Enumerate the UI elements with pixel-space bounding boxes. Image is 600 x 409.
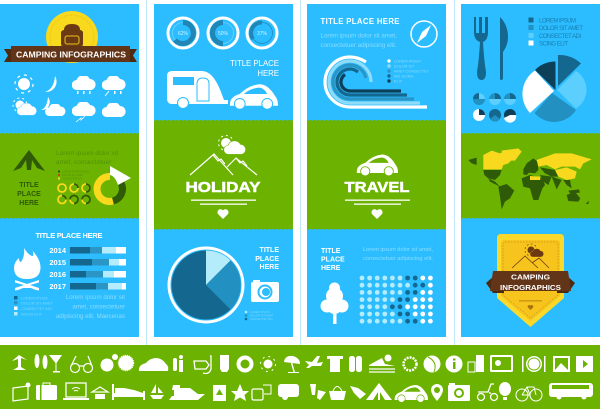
icon: safe: [490, 355, 513, 372]
icon: plane: [305, 356, 323, 368]
legend: bars: SCING ELIT: [21, 312, 43, 316]
ribbon: camping infographics: INFOGRAPHICS: [500, 283, 561, 292]
legend: bars: DOLOR SIT AMET: [21, 302, 53, 306]
legend: bars: [14, 296, 53, 316]
heading: title place here 2: PLACE: [255, 256, 279, 263]
ribbon: camping infographics: CAMPING: [511, 272, 550, 282]
icon: moon: [45, 76, 57, 92]
heading: title place here: HERE: [257, 69, 279, 78]
heading: title place here 2: TITLE: [321, 248, 341, 255]
panel: camping weather: [0, 4, 139, 337]
heading: title place here: TITLE PLACE HERE: [320, 17, 400, 26]
heading: travel: TRAVEL: [344, 179, 410, 196]
divider: shield: [519, 300, 542, 302]
legend: spiral: ELIT: [394, 80, 403, 84]
text block: green lorem: amet, consectetuer: [56, 159, 112, 166]
icon: pin: [431, 384, 443, 401]
badge: backpack: [46, 11, 98, 63]
panel: holiday: [154, 4, 293, 337]
icon: rain cloud: [72, 75, 96, 94]
icon: dice: [252, 385, 271, 400]
legend: pie: DOLOR SIT AMET: [250, 314, 274, 318]
pie chart: [169, 248, 243, 322]
icon: car: [230, 84, 278, 109]
spiral bar chart: [325, 57, 427, 107]
text block: blue lorem: Lorem ipsum dolor sit: [66, 294, 125, 301]
text block: lorem: consectetuer adipiscing elit.: [320, 42, 397, 49]
stacked bar chart: [49, 246, 126, 291]
legend: food: [528, 18, 583, 48]
icon: sun: [15, 75, 33, 93]
icon: tent: [13, 150, 45, 171]
icon: plate: [522, 356, 546, 372]
icon: storm cloud: [102, 75, 126, 96]
icon: palm: [12, 355, 27, 370]
legend: spiral: AMET CONSECTET: [394, 70, 430, 74]
weather icons: [13, 75, 126, 122]
icon: sun behind cloud: [13, 98, 37, 115]
legend: pie: CONSECTET ADI: [250, 317, 273, 321]
ring chart: 37%: 37%: [257, 31, 268, 37]
icon: sun burst: [118, 356, 134, 370]
ring chart: 62%: [168, 18, 198, 48]
ring chart: 62%: 62%: [178, 31, 189, 37]
icon: life ring: [238, 358, 252, 370]
pie chart: exploded: [522, 55, 586, 122]
legend: bars: LOREM IPSUM: [21, 296, 48, 300]
text block: blue lorem: amet, consectetuer: [72, 304, 125, 310]
text block: blue lorem: adipiscing elit. Maecenas: [56, 313, 125, 320]
heading: title place here 2: HERE: [260, 264, 279, 271]
heading: title place here 2: TITLE: [260, 247, 279, 254]
donut chart: [97, 166, 131, 201]
badge: shield: [486, 234, 575, 327]
icon: tree: [320, 282, 348, 324]
icon: camera: [251, 280, 279, 302]
icon: globe pin: [100, 354, 118, 372]
panel: world and food: [461, 4, 600, 337]
icon: sun and cloud: [218, 136, 246, 154]
legend: spiral: LOREM IPSUM: [394, 60, 421, 64]
legend: food: DOLOR SIT AMET: [539, 26, 583, 32]
icon: cloud: [102, 102, 126, 117]
legend: spiral: DOLOR SIT: [394, 64, 415, 68]
icon: film: [576, 356, 593, 372]
icon: mountains: [190, 154, 257, 175]
legend: food: SCING ELIT: [539, 42, 568, 48]
icon: heart (shield): [528, 305, 533, 310]
icon: flippers: [310, 384, 326, 400]
small ring charts: [58, 184, 90, 204]
legend: pie: [245, 310, 274, 321]
icon: glasses: [70, 356, 92, 372]
icon: car small: [395, 385, 428, 402]
heading: title place here (green): TITLE: [19, 182, 39, 189]
icon: fish: [350, 386, 366, 399]
icon: compass: [411, 21, 437, 47]
icon: cocktail: [49, 355, 62, 372]
icon: laptop: [63, 383, 89, 400]
ring chart: 50%: [208, 18, 238, 48]
icon: campfire: [14, 248, 41, 290]
icon: knife: [500, 17, 508, 80]
legend: bars: CONSECTET ADI: [21, 307, 52, 311]
heading: title place here (blue): TITLE PLACE HERE: [36, 231, 102, 240]
icon: caravan: [167, 71, 228, 108]
icon: suitcase: [36, 383, 57, 400]
small pie charts: [473, 93, 516, 123]
ring chart: 37%: [247, 18, 277, 48]
legend: green: [58, 170, 89, 180]
world map: [468, 148, 592, 209]
icon: globe clock: [404, 358, 416, 370]
icon: tent small: [366, 383, 392, 400]
icon: flip flops: [34, 354, 48, 369]
legend: food: CONSECTET ADI: [539, 34, 581, 40]
icon: map: [13, 382, 30, 401]
heading: title place here (green): PLACE: [17, 191, 41, 198]
icon: bed: [112, 384, 145, 400]
icon: sun and cloud (badge): [525, 244, 544, 257]
band: icon strip: [0, 345, 600, 409]
text block: green lorem: Lorem ipsum dolor sit: [56, 150, 118, 157]
legend: green: CONSECTET ADI: [62, 178, 82, 180]
icon: swimmer: [369, 354, 395, 372]
icon: scooter: [478, 384, 498, 400]
icon: heart travel: [371, 209, 383, 219]
icon: small caravan: [278, 384, 299, 400]
icon: beach bag: [329, 386, 346, 400]
legend: spiral: ADI SCING: [394, 74, 413, 78]
text block: lorem: Lorem ipsum dolor sit amet,: [320, 32, 397, 40]
icon: people: [173, 355, 183, 372]
icon: picture: [553, 356, 570, 372]
text block: lorem 2: consectetuer adipiscing elit.: [363, 256, 433, 262]
ribbon: camping infographics: [486, 271, 575, 293]
divider: travel: [345, 200, 410, 205]
icon: lightning cloud: [72, 101, 96, 122]
stacked bar chart: 2017: [49, 282, 66, 291]
heading: holiday: HOLIDAY: [186, 179, 260, 196]
icon: balloon: [499, 382, 511, 400]
icon: fork: [474, 17, 488, 80]
ribbon: camping infographics: CAMPING INFOGRAPHICS: [16, 50, 127, 60]
icon: car travel: [357, 154, 398, 176]
icon: star: [231, 384, 249, 401]
icon: camera small: [448, 383, 470, 401]
panel: travel: [307, 4, 446, 337]
legend: food: LOREM IPSUM: [539, 18, 576, 24]
icon: umbrella: [284, 356, 300, 373]
icon: sun small: [260, 356, 276, 372]
icon: beach ball: [424, 356, 440, 372]
legend: green: DOLOR SIT AMET: [62, 174, 83, 177]
heading: title place here 2: PLACE: [321, 256, 345, 264]
icon: moon behind cloud: [41, 97, 65, 116]
icon: info: [446, 356, 462, 372]
icon: bus: [549, 383, 593, 400]
stacked bar chart: 2015: [49, 258, 66, 267]
heading: title place here (green): HERE: [19, 200, 39, 207]
icon: building: [468, 355, 484, 372]
icon: bicycle: [516, 387, 542, 401]
text block: lorem 2: Lorem ipsum dolor sit amet,: [363, 247, 433, 253]
stacked bar chart: 2016: [49, 270, 66, 279]
icon: ship: [169, 385, 205, 400]
icon: column: [327, 356, 343, 372]
stacked bar chart: 2014: [49, 246, 67, 255]
icon: taxi: [139, 358, 168, 371]
legend: pie: LOREM IPSUM: [250, 310, 270, 314]
icon: sunscreen: [220, 355, 229, 372]
ring chart: 50%: 50%: [218, 31, 229, 37]
ribbon: camping infographics: [4, 46, 137, 62]
heading: title place here 2: HERE: [321, 265, 341, 272]
heading: title place here: TITLE PLACE: [230, 59, 279, 68]
icon: hanger: [92, 387, 108, 399]
icon: tanks: [349, 356, 362, 372]
divider: holiday: [191, 200, 256, 205]
icon: playing card: [213, 385, 226, 401]
dot matrix chart: [360, 276, 433, 324]
icon: heart: [217, 209, 229, 219]
legend: green: LOREM IPSUM DOLOR: [62, 170, 89, 174]
icon: sailboat: [150, 384, 164, 399]
legend: spiral: [387, 59, 430, 84]
icon: mountains (badge): [512, 256, 549, 268]
icon: snorkel mask: [194, 356, 211, 374]
